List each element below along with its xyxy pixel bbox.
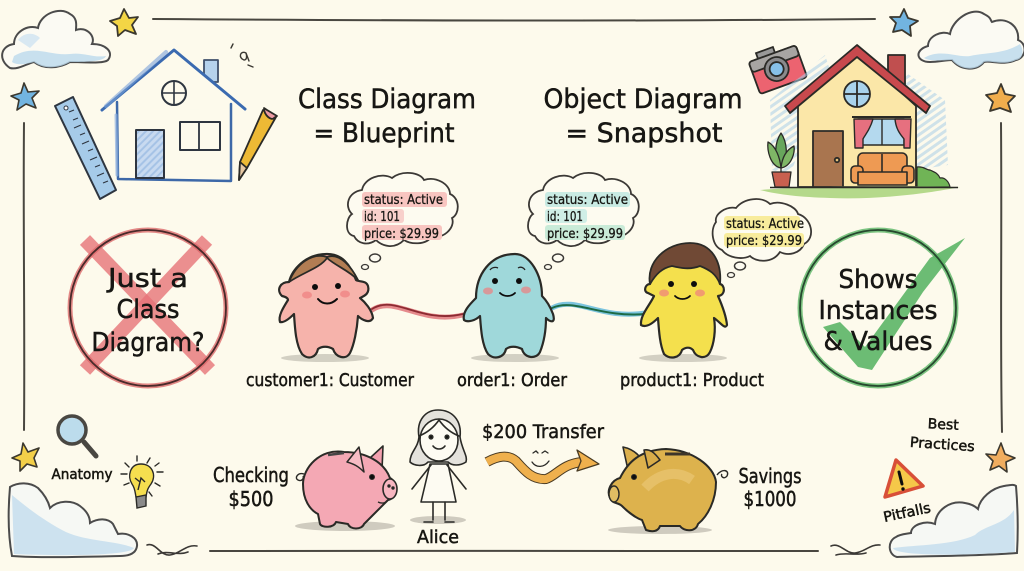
label: anatomy: Anatomy	[52, 467, 112, 483]
thought bubble: order: price: $29.99	[547, 227, 623, 242]
thought bubble: order	[528, 173, 639, 270]
star: bottom right orange	[986, 443, 1015, 472]
thought bubble: order: id: 101	[547, 210, 583, 225]
callout: shows instances and values, check	[800, 230, 965, 386]
icon: ruler	[55, 97, 116, 199]
thought bubble: product	[713, 199, 811, 278]
callout: just a class diagram, crossed out: Class	[116, 295, 180, 325]
icon: camera	[747, 39, 807, 94]
label: best practices: Best	[927, 416, 960, 434]
label: savings: $1000	[744, 487, 796, 511]
label: savings: Savings	[738, 464, 802, 488]
heading: object diagram	[544, 84, 742, 149]
icon: light bulb	[121, 456, 163, 508]
cloud: bottom right	[890, 485, 1018, 557]
callout: shows instances and values, check: Instances	[818, 296, 938, 326]
star: bottom left yellow	[12, 443, 39, 471]
star: right orange	[986, 84, 1015, 112]
label: transfer: $200 Transfer	[482, 421, 604, 443]
thought bubble: customer: status: Active	[364, 193, 443, 208]
bush	[917, 167, 950, 187]
blue sky hatching	[770, 55, 948, 175]
ground	[760, 186, 960, 198]
label: savings	[738, 464, 802, 511]
callout: just a class diagram, crossed out: Just a	[106, 264, 188, 294]
label: checking: Checking	[213, 463, 289, 487]
callout: shows instances and values, check: & Values	[824, 327, 932, 357]
color house	[760, 45, 960, 198]
thought bubble: customer: price: $29.99	[364, 227, 439, 242]
label: checking	[213, 463, 289, 511]
heading: object diagram: Object Diagram	[544, 84, 742, 115]
thought bubble: customer	[347, 173, 458, 270]
character: alice	[410, 410, 466, 524]
window with curtains	[852, 117, 911, 148]
callout: just a class diagram, crossed out	[70, 230, 226, 386]
thought bubble: order: status: Active	[547, 193, 628, 208]
blueprint house	[102, 50, 245, 181]
label: pitfalls: Pitfalls	[882, 500, 932, 526]
star: top yellow	[110, 9, 138, 36]
character: order1	[464, 254, 559, 362]
thought bubble: customer: id: 101	[364, 210, 400, 225]
label: order1: order1: Order	[457, 370, 568, 391]
icon: magnifier	[58, 416, 96, 456]
link: order to product	[552, 304, 645, 315]
icon: pencil	[239, 108, 277, 180]
label: best practices	[909, 416, 975, 455]
sofa	[851, 153, 914, 185]
character: customer1	[279, 254, 373, 362]
gold piggy bank	[608, 447, 728, 534]
cloud: top right	[918, 12, 1024, 69]
star: top right blue	[890, 9, 918, 36]
heading: class diagram: = Blueprint	[314, 118, 454, 149]
label: product1: product1: Product	[620, 370, 764, 391]
label: best practices: Practices	[909, 435, 975, 455]
cloud: bottom left	[9, 483, 137, 557]
squiggle: bottom right	[831, 545, 880, 555]
label: checking: $500	[228, 487, 274, 511]
thought bubble: product: price: $29.99	[726, 234, 802, 249]
character: product1	[639, 243, 727, 362]
pink piggy bank	[295, 446, 397, 531]
potted plant	[768, 133, 794, 187]
label: customer1: customer1: Customer	[246, 370, 415, 391]
icon: doodle above roof	[231, 44, 253, 67]
icon: warning triangle	[885, 460, 923, 497]
thought bubble: product: status: Active	[726, 217, 804, 232]
squiggle: bottom left	[147, 545, 197, 555]
cloud: top left	[2, 11, 110, 68]
heading: class diagram: Class Diagram	[298, 84, 476, 115]
door	[813, 131, 843, 187]
link: customer to order	[372, 305, 463, 317]
round window	[844, 81, 870, 107]
arrow: transfer	[487, 450, 599, 479]
heading: class diagram	[298, 84, 476, 149]
heading: object diagram: = Snapshot	[566, 118, 722, 149]
callout: just a class diagram, crossed out: Diagram?	[92, 328, 204, 358]
label: alice: Alice	[417, 527, 459, 548]
callout: shows instances and values, check: Shows	[838, 265, 918, 295]
star: left blue	[11, 83, 39, 110]
